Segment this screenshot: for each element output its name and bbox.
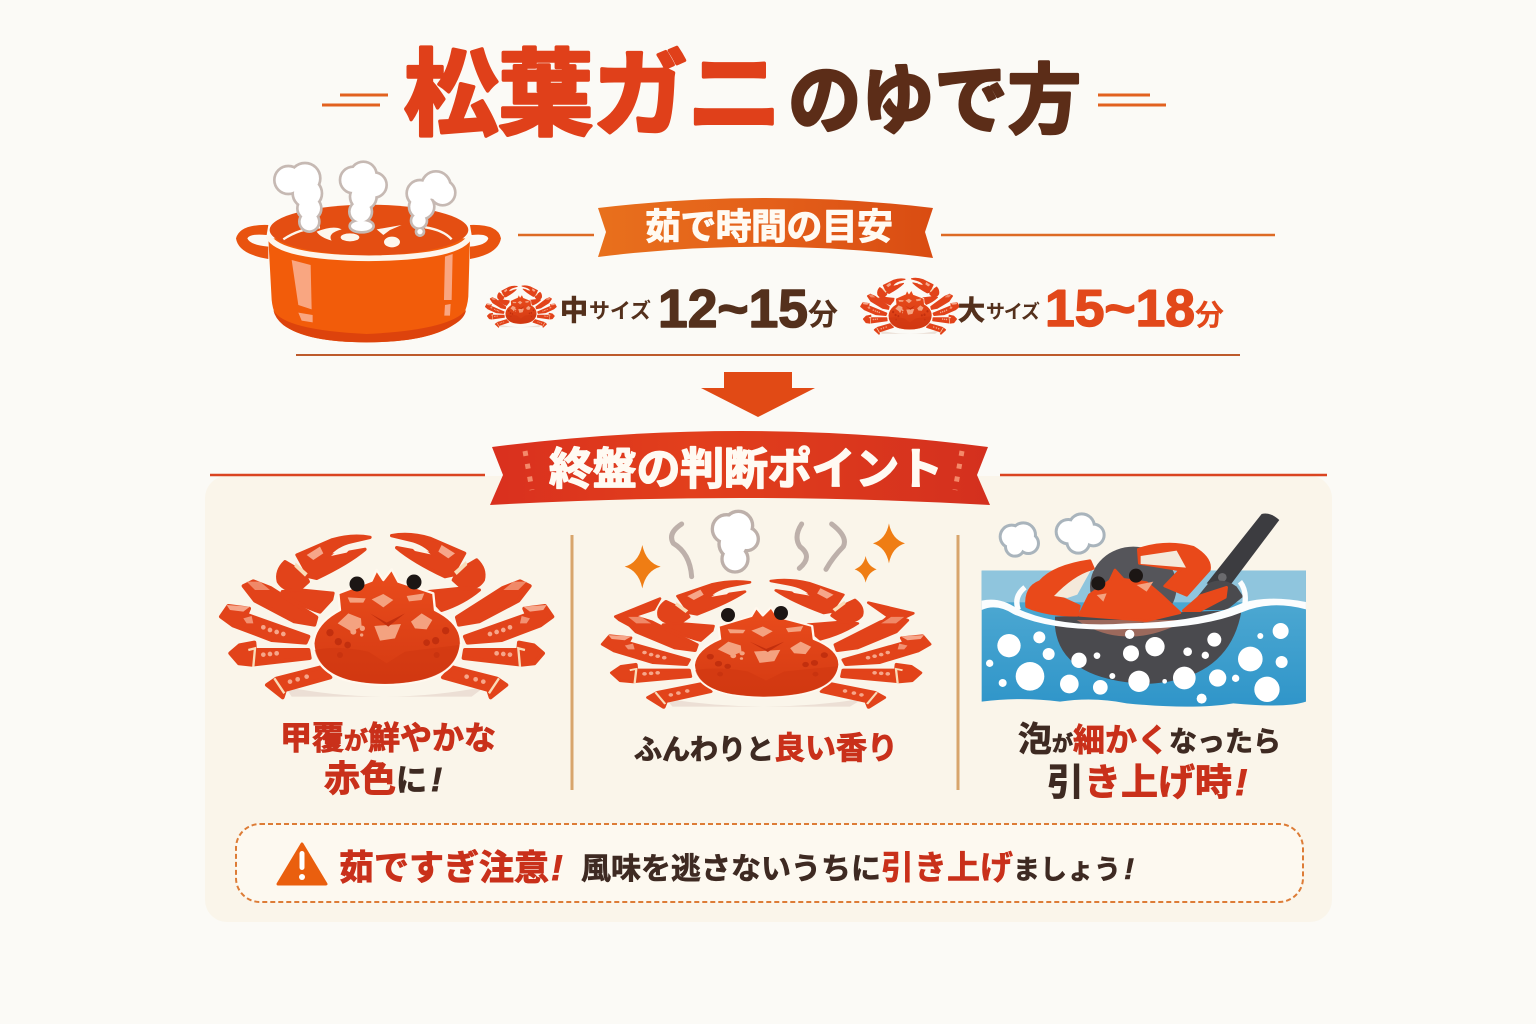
large size time <box>861 278 1224 338</box>
caption: aroma: ふんわりと良い香り <box>634 731 898 766</box>
icon: boiling pot <box>236 163 501 342</box>
large size time: 大 <box>958 296 985 326</box>
medium size time <box>485 279 838 339</box>
medium size time: 12~15 <box>658 279 808 339</box>
callout: over-boiling warning: 風味を逃さないうちに引き上げましょう! <box>581 849 1134 886</box>
caption: shell colour: 甲覆が鮮やかな <box>280 720 496 756</box>
large size time: サイズ <box>986 300 1040 323</box>
caption: lift time: 引き上げ時! <box>1047 762 1247 803</box>
callout: over-boiling warning: 茹ですぎ注意! <box>339 849 563 888</box>
title: のゆで方 <box>788 59 1081 144</box>
banner: boil time heading: 茹で時間の目安 <box>645 206 893 247</box>
banner: judgement heading: 終盤の判断ポイント <box>549 445 943 494</box>
icon: warning triangle <box>278 844 326 884</box>
large size time: 15~18 <box>1045 280 1195 338</box>
panel: judgement points <box>205 431 1332 922</box>
medium size time: サイズ <box>589 299 651 323</box>
caption: fine bubbles: 泡が細かくなったら <box>1018 721 1281 759</box>
caption: red colour: 赤色に! <box>324 758 442 799</box>
title: 松葉ガニ <box>404 42 782 147</box>
title <box>322 42 1166 147</box>
illustration: crab with aroma <box>603 513 930 707</box>
banner: boil time heading <box>518 198 1275 258</box>
large size time: 分 <box>1195 299 1224 332</box>
banner: judgement heading <box>490 431 990 505</box>
callout: over-boiling warning <box>236 824 1303 902</box>
illustration: red crab <box>221 534 552 697</box>
medium size time: 中 <box>560 295 588 326</box>
illustration: crab in skimmer with bubbles <box>982 513 1306 707</box>
medium size time: 分 <box>808 299 838 332</box>
arrow <box>701 372 815 417</box>
